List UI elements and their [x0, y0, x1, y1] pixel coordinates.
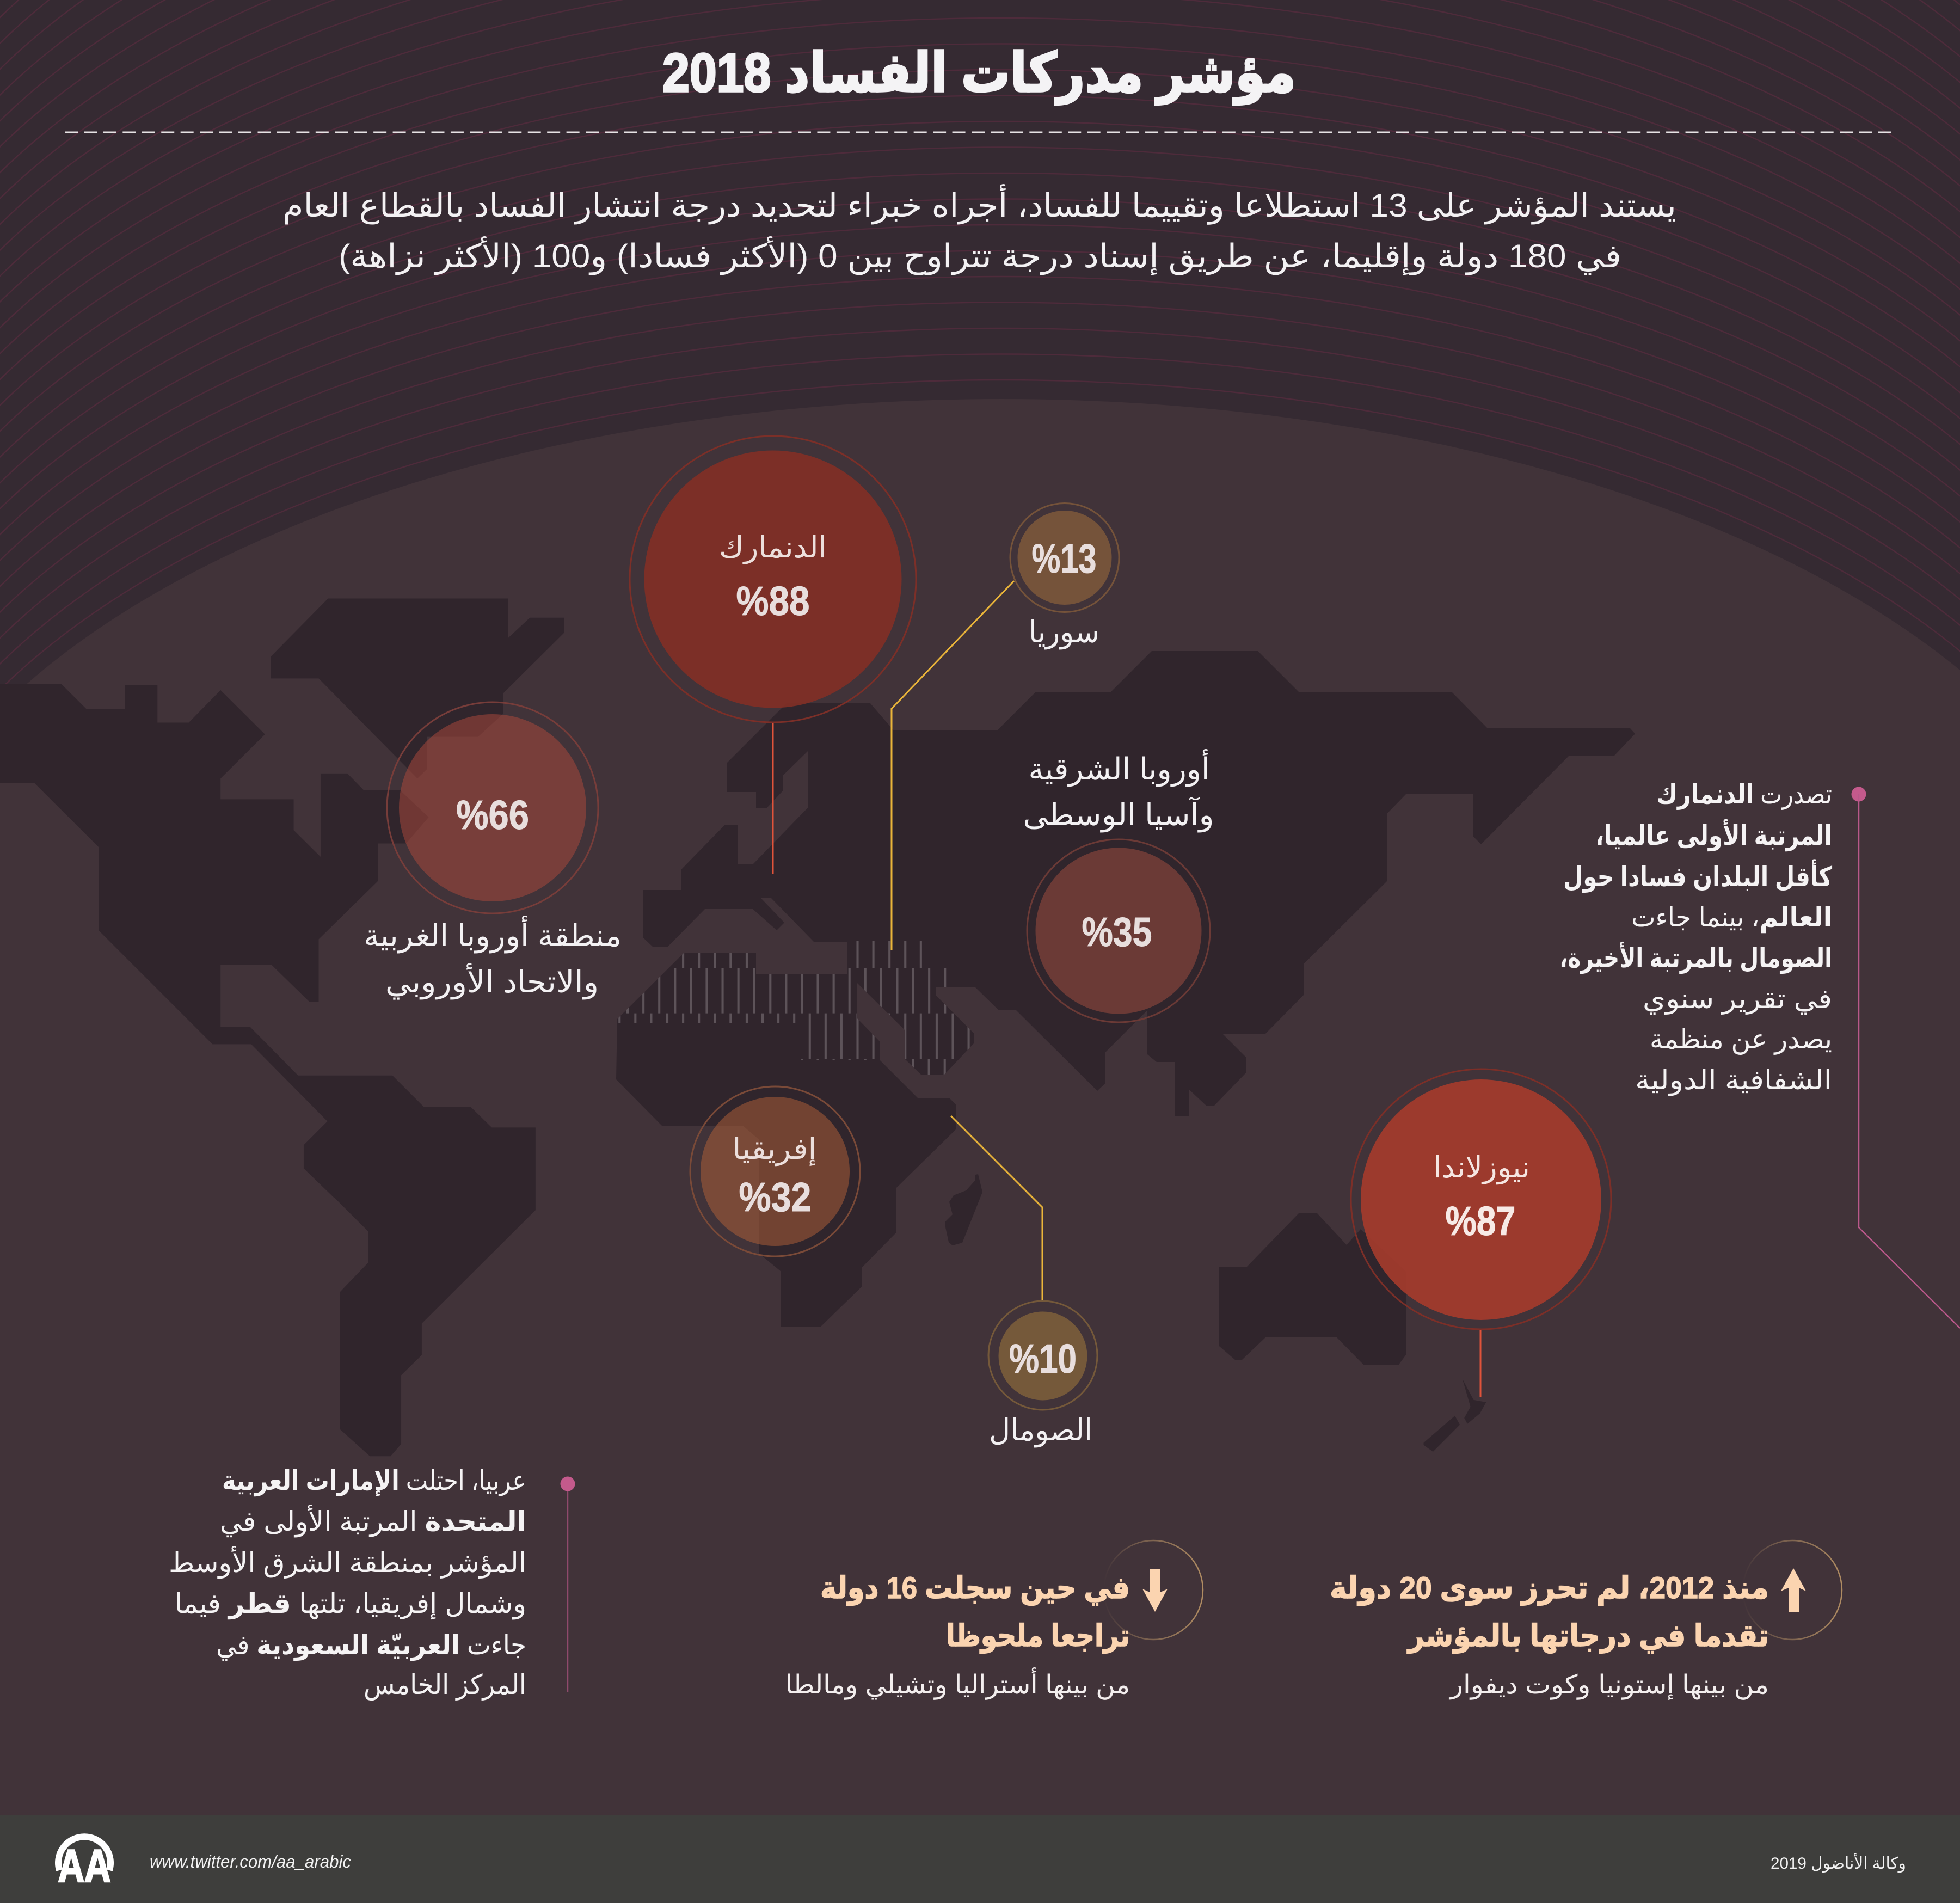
concentric arc pattern: [0, 0, 1960, 952]
bubble: Africa 32%: إفريقيا: [733, 1133, 816, 1166]
map: Madagascar: [945, 1174, 982, 1245]
text block: Denmark and Somalia: الشفافية الدولية: [1635, 1065, 1832, 1096]
bubble: Somalia 10%: %10: [1009, 1336, 1077, 1382]
bubble: New Zealand 87%: %87: [1446, 1198, 1515, 1244]
stat: decline 16 countries: في حين سجلت 16 دولة: [820, 1570, 1130, 1606]
bubble: New Zealand 87%: [1351, 1069, 1611, 1329]
text block: Denmark and Somalia: تصدرت الدنمارك: [1656, 779, 1832, 810]
label: Eastern Europe and Central Asia: أوروبا الشرقية: [1029, 749, 1209, 787]
bubble: Denmark 88%: [630, 436, 916, 722]
bubble: Africa 32%: [690, 1086, 860, 1256]
bubble: Syria 13%: %13: [1032, 536, 1096, 581]
map: New Zealand: [1424, 1379, 1486, 1452]
text block: Denmark and Somalia: المرتبة الأولى عالميا،: [1595, 819, 1832, 852]
connector: Somalia: [951, 1116, 1042, 1301]
intro text: [282, 184, 1676, 275]
bubble: Denmark 88%: الدنمارك: [719, 531, 827, 564]
callout marker: Denmark and Somalia: [1852, 787, 1960, 1328]
map: South America: [334, 1198, 536, 1456]
label: Western Europe: [364, 916, 622, 1000]
callout marker: Arab countries: [561, 1476, 575, 1692]
bubble: Eastern Europe 35%: [1027, 839, 1210, 1022]
label: Syria: سوريا: [1029, 615, 1099, 650]
logo: AA: AA: [58, 1840, 111, 1892]
text block: Denmark and Somalia: العالم، بينما جاءت: [1631, 902, 1832, 933]
stat: progress 20 countries: تقدما في درجاتها بالمؤشر: [1406, 1618, 1769, 1654]
stat: decline 16 countries: من بينها أستراليا وتشيلي ومالطا: [785, 1667, 1130, 1700]
bubble: Eastern Europe 35%: %35: [1082, 909, 1152, 955]
stat: progress 20 countries: [1330, 1570, 1769, 1700]
bubble: Somalia 10%: [988, 1301, 1097, 1410]
map: Eurasia and Africa: [616, 651, 1635, 1327]
bubble: Africa 32%: %32: [739, 1174, 811, 1220]
stat: decline 16 countries: تراجعا ملحوظا: [946, 1618, 1130, 1654]
bubble: New Zealand 87%: نيوزلاندا: [1433, 1151, 1530, 1184]
connector: Denmark: [772, 722, 774, 874]
label: Eastern Europe and Central Asia: وآسيا الوسطى: [1023, 796, 1214, 833]
text block: Arab countries: [169, 1465, 526, 1701]
connector: New Zealand: [1479, 1329, 1482, 1397]
bubble: Syria 13%: [1010, 503, 1119, 612]
stat: decline 16 countries: [785, 1570, 1130, 1700]
footer link: www.twitter.com/aa_arabic: [150, 1852, 351, 1871]
connector: Syria: [892, 581, 1014, 950]
footer bar: [0, 1815, 1960, 1903]
footer credit: وكالة الأناضول 2019: [1771, 1852, 1906, 1873]
label: Somalia: الصومال: [989, 1413, 1092, 1448]
text block: Denmark and Somalia: كأقل البلدان فسادا حول: [1563, 859, 1833, 893]
bubble: Denmark 88%: %88: [736, 578, 810, 624]
text block: Arab countries: عربيا، احتلت الإمارات العربية: [222, 1465, 526, 1497]
label: Western Europe: والاتحاد الأوروبي: [385, 963, 599, 1000]
text block: Arab countries: المركز الخامس: [364, 1669, 526, 1701]
map: Greenland: [271, 598, 564, 778]
bubble: Western Europe 66%: [387, 702, 598, 913]
text block: Arab countries: المتحدة المرتبة الأولى في: [220, 1505, 526, 1538]
text block: Arab countries: وشمال إفريقيا، تلتها قطر فيما: [175, 1588, 526, 1620]
title: مؤشر مدركات الفساد 2018: [662, 42, 1296, 105]
stat: progress 20 countries: من بينها إستونيا وكوت ديفوار: [1449, 1671, 1769, 1700]
intro text: في 180 دولة وإقليما، عن طريق إسناد درجة تتراوح بين 0 (الأكثر فسادا) و100 (الأكثر نزاهة): [339, 236, 1621, 275]
text block: Denmark and Somalia: الصومال بالمرتبة الأخيرة،: [1559, 941, 1832, 974]
icon: down arrow in ring: [1104, 1540, 1203, 1640]
text block: Arab countries: جاءت العربيّة السعودية في: [216, 1630, 526, 1661]
text block: Arab countries: المؤشر بمنطقة الشرق الأوسط: [169, 1546, 526, 1579]
stat: progress 20 countries: منذ 2012، لم تحرز سوى 20 دولة: [1330, 1570, 1769, 1606]
dashed divider: [65, 132, 1891, 133]
bubble: Western Europe 66%: %66: [456, 792, 529, 838]
intro text: يستند المؤشر على 13 استطلاعا وتقييما للفساد، أجراه خبراء لتحديد درجة انتشار الفساد بالقطاع العام: [282, 184, 1676, 225]
label: Western Europe: منطقة أوروبا الغربية: [364, 916, 622, 954]
text block: Denmark and Somalia: يصدر عن منظمة: [1650, 1024, 1832, 1055]
text block: Denmark and Somalia: [1559, 779, 1833, 1096]
world map: [0, 598, 1635, 1456]
label: Eastern Europe and Central Asia: [1023, 749, 1214, 833]
lighter dome panel: [0, 399, 1960, 1815]
icon: up arrow in ring: [1743, 1540, 1842, 1640]
map: North America: [0, 684, 536, 1198]
map hatch: Middle East and North Africa: [619, 941, 969, 1075]
text block: Denmark and Somalia: في تقرير سنوي: [1643, 984, 1832, 1015]
map: Australia: [1219, 1213, 1406, 1365]
